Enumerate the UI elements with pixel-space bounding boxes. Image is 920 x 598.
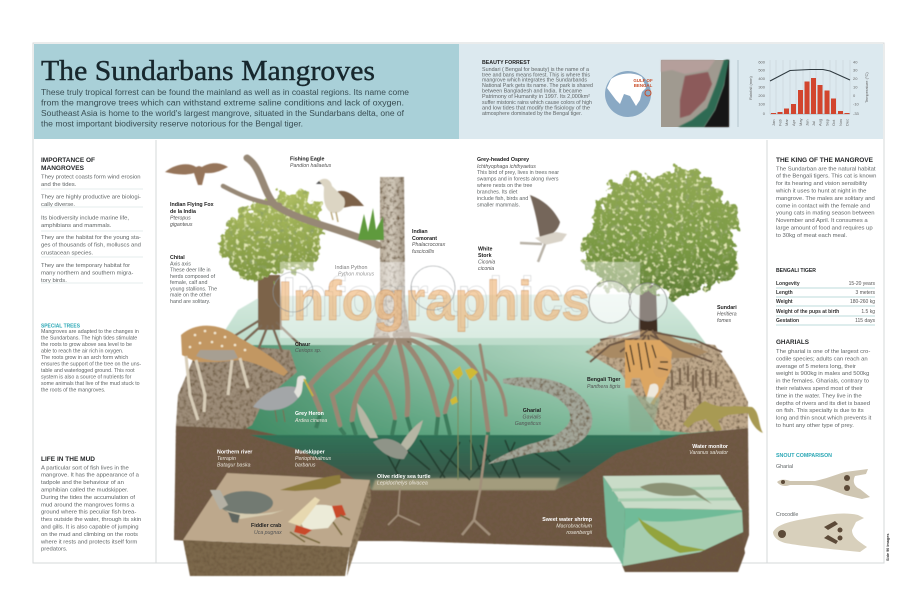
label: northern river terrapin: Terrapin — [217, 456, 236, 462]
image credit: Side 90 Images — [886, 534, 890, 561]
panel: special trees: Mangroves are adapted to the changes in — [41, 329, 139, 335]
panel: importance of mangroves: ges of thousands of fish, molluscs and — [41, 242, 141, 248]
right axis: 0 — [853, 93, 856, 98]
panel: life in the mud: ground where this peculiar fish brea- — [41, 510, 136, 516]
right axis — [853, 60, 860, 116]
central trunk — [372, 177, 412, 345]
panel: king of the mangrove: of the Bengali tigers. This cat is known — [776, 174, 876, 180]
panel: gharials: their relatives spend most of their — [776, 386, 863, 392]
right axis: 10 — [853, 84, 858, 90]
month labels: Feb — [778, 118, 782, 126]
label: sweet water shrimp: Macrobrachium — [556, 524, 593, 530]
month labels: Sep — [824, 118, 830, 126]
panel: importance of mangroves: many northern and southern migra- — [41, 270, 133, 276]
label: grey-headed osprey: where nests on the tree — [477, 183, 532, 189]
panel: importance of mangroves: They are highly productive are biologi- — [41, 195, 141, 201]
label: white stork: Stork — [478, 253, 492, 259]
label: white stork: Ciconia — [478, 260, 495, 266]
branches — [247, 158, 378, 245]
month labels: Dec — [844, 119, 850, 126]
label: water monitor: Water monitor — [692, 444, 728, 450]
icon: flying osprey — [520, 195, 567, 262]
panel: gharials: average of 5 meters long, their — [776, 364, 856, 370]
labels on illustration — [170, 157, 737, 536]
label: grey-headed osprey: swamps and in forests along rivers — [477, 176, 559, 182]
icon: crocodile skull — [773, 514, 867, 552]
label: cormorant: Phalacrocorax — [412, 242, 446, 248]
panel: importance of mangroves: crustacean species. — [41, 250, 93, 256]
panel: life in the mud: LIFE IN THE MUD — [41, 456, 95, 463]
icon: mudskipper — [280, 475, 341, 491]
panel: importance of mangroves: and the tides. — [41, 182, 77, 188]
label: chital: Axis axis — [170, 262, 191, 268]
sandy river bed — [372, 478, 560, 490]
label: sweet water shrimp — [542, 517, 593, 536]
left tree canopy — [219, 192, 325, 279]
table: bengali tiger: BENGALI TIGER — [776, 268, 816, 274]
table: bengali tiger: 180-260 kg — [850, 299, 875, 305]
panel: importance of mangroves — [41, 157, 143, 284]
month labels — [771, 118, 850, 126]
sample top face — [603, 475, 742, 510]
icon: olive ridley turtle — [357, 403, 423, 459]
left axis: 400 — [758, 76, 766, 81]
label: chital: hand are solitary. — [170, 299, 210, 305]
panel: special trees: The roots grow in an arch form which — [41, 355, 128, 361]
label: flying fox: Pteropus — [170, 216, 191, 222]
label: fishing eagle: Pandion haliaetus — [290, 163, 332, 169]
month labels: Mar — [784, 118, 789, 126]
panel: gharials: on fish. This specialty is due to its — [776, 408, 864, 414]
sample left face — [603, 476, 625, 566]
right axis: 20 — [853, 76, 858, 81]
panel: gharials: to hunt any other type of prey. — [776, 423, 854, 429]
label: chaur: Chaur — [295, 342, 310, 348]
panel: importance of mangroves: amphibians and mammals. — [41, 223, 112, 229]
label: sundari: fomes — [717, 318, 732, 324]
panel: importance of mangroves: They are the habitat for the young sta- — [41, 235, 141, 241]
label: cormorant: fuscicollis — [412, 249, 435, 255]
mangrove illustration — [165, 158, 763, 576]
panel: special trees — [41, 323, 141, 394]
label: python — [335, 265, 374, 278]
label: cormorant: Indian — [412, 229, 428, 235]
satellite map — [661, 60, 729, 127]
watermark: Infographics — [282, 265, 592, 328]
panel: gharials: weight is 900kg in males and 500kg — [775, 371, 869, 377]
label: flying fox — [170, 202, 214, 228]
label: chaur — [295, 342, 321, 354]
label: cormorant — [412, 229, 446, 255]
block: mud sample — [183, 473, 371, 576]
table: bengali tiger: Weight of the pups at birth — [776, 309, 839, 315]
intro text: the most important biodiversity reserve notorious for the Bengal tiger. — [41, 120, 303, 128]
label: sweet water shrimp: rosenbergii — [566, 530, 593, 536]
panel: importance of mangroves: MANGROVES — [41, 165, 84, 172]
month labels: Nov — [838, 119, 843, 126]
water shading — [240, 345, 660, 435]
header panel: title and intro — [34, 44, 459, 139]
label: grey heron: Ardea cinerea — [294, 418, 327, 424]
panel: importance of mangroves: They are the temporary habitat for — [41, 263, 130, 269]
chart separator — [737, 60, 739, 127]
label: white stork: White — [478, 247, 492, 253]
left axis: 600 — [758, 60, 766, 64]
short root into soil — [388, 488, 420, 525]
table: bengali tiger — [776, 268, 876, 325]
label: water monitor — [689, 444, 728, 456]
label: mudskipper: Periophthalmus — [295, 456, 331, 462]
label: white stork — [478, 247, 495, 272]
label: grey-headed osprey: This bird of prey, lives in trees near — [477, 170, 559, 176]
label: water monitor: Varanus salvator — [689, 450, 728, 456]
icon: gharial — [488, 377, 592, 464]
label: chital: young stallions. The — [170, 286, 217, 292]
beauty forrest text: Patrimony of Humanity in 1997. Its 2,000km² — [482, 94, 590, 100]
icon: gharial skull — [777, 469, 870, 499]
label: grey-headed osprey: branches. Its diet — [477, 190, 518, 196]
label: fishing eagle — [290, 157, 332, 169]
panel: special trees: the roots to grow above sea level to be — [41, 342, 132, 348]
watermark: Infographics — [278, 269, 590, 332]
block right face — [347, 480, 371, 576]
label: olive ridley sea turtle: Lepidochelys olivacea — [377, 480, 428, 486]
label: flying fox: de la India — [170, 209, 196, 215]
tiger reflection — [628, 395, 660, 432]
table: bengali tiger: 1.5 kg — [861, 309, 875, 315]
seedling with yellow leaves — [450, 366, 478, 480]
panel: king of the mangrove — [775, 157, 876, 239]
title: The Sundarbans Mangroves — [41, 55, 375, 87]
panel: special trees: the Sundarbans. The high tides stimulate — [41, 336, 137, 342]
label: northern river terrapin: Batagur baska — [217, 462, 251, 468]
panel: king of the mangrove: November and April. It consumes a — [776, 218, 868, 224]
beauty forrest text: National Park gets its name. The park is shared — [482, 83, 593, 89]
panel: snout comparison: Crocodile — [776, 512, 798, 518]
locator globe: BENGAL — [634, 83, 653, 88]
label: grey-headed osprey — [477, 157, 559, 208]
month labels: Oct — [831, 119, 836, 126]
beauty forrest text: tree and bans means forest. This is where this — [482, 72, 590, 78]
panel: special trees: some animals that live of the mud stuck to — [41, 381, 140, 387]
panel: king of the mangrove: The Sundarban are the natural habitat — [776, 166, 876, 172]
label: grey-headed osprey: Grey-headed Osprey — [477, 157, 529, 163]
right tree — [584, 170, 738, 362]
label: chital: herds composed of — [170, 274, 216, 280]
panel: special trees: SPECIAL TREES — [41, 323, 80, 329]
month labels: Jun — [804, 120, 810, 126]
label: olive ridley sea turtle: Olive ridley sea turtle — [377, 474, 431, 480]
left axis — [758, 60, 766, 116]
long root into soil — [462, 435, 490, 535]
sample sand floor — [623, 512, 743, 566]
label: gharial: Gavialis — [523, 414, 541, 420]
month labels: Jul — [811, 121, 816, 126]
icon: indian flying fox — [165, 163, 228, 185]
header panel: beauty forrest, map and climate chart — [459, 44, 883, 139]
left axis: 100 — [758, 102, 766, 106]
label: bengal tiger: Panthera tigris — [587, 384, 621, 390]
panel: life in the mud: mud around the mangroves forms a — [41, 502, 135, 508]
panel: snout comparison: Gharial — [776, 464, 793, 470]
pale water dome — [222, 294, 720, 435]
label: fiddler crab: Uca pugnax — [254, 530, 282, 536]
label: grey-headed osprey: Ichthyophaga ichthyaetus — [477, 164, 536, 170]
beauty forrest text: between Bangladesh and India. It became — [482, 88, 582, 94]
label: chital: Chital — [170, 255, 185, 261]
panel: king of the mangrove: THE KING OF THE MANGROVE — [776, 157, 873, 164]
left bank — [176, 345, 297, 429]
label: chital: female, calf and — [170, 280, 207, 286]
beauty forrest text: BEAUTY FORREST — [482, 60, 531, 66]
beauty forrest text: Sundari ( Bengal for beauty) is the name of a — [482, 67, 589, 73]
grass tuft — [358, 208, 384, 240]
icon: bengal tiger — [625, 340, 672, 432]
panel: gharials: The gharial is one of the largest cro- — [776, 349, 870, 355]
right tree root tangle — [596, 330, 708, 358]
panel: importance of mangroves: IMPORTANCE OF — [41, 157, 95, 164]
panel: life in the mud: on the mud and climbing on the roots — [41, 532, 138, 538]
panel: gharials — [775, 339, 872, 429]
right bank — [585, 335, 748, 433]
panel: life in the mud: where it rests and protects itself form — [40, 539, 137, 545]
icon: shrimp front — [638, 517, 706, 553]
panel: life in the mud: A particular sort of fish lives in the — [41, 465, 129, 471]
panel: gharials: GHARIALS — [776, 339, 809, 346]
panel: king of the mangrove: young cats in mating season between — [776, 211, 875, 217]
label: chital — [170, 255, 217, 305]
root reflections — [316, 414, 488, 436]
panel: special trees: able to reach the air rich in oxygen. — [41, 348, 123, 354]
sample front face — [623, 508, 743, 566]
beauty forrest text: suffer mistonic rains which cause colors of high — [482, 100, 592, 106]
right axis: 30 — [853, 68, 858, 72]
panel: king of the mangrove: to 30kg of meat each meal. — [776, 233, 847, 239]
table: bengali tiger: Weight — [776, 299, 793, 305]
intro text — [41, 88, 410, 128]
table: bengali tiger: Longevity — [776, 281, 800, 287]
rainfall bars — [771, 78, 850, 114]
month labels: Apr — [791, 119, 796, 126]
panel: gharials: depths of rivers and its diet is based — [776, 401, 870, 407]
label: grey heron — [294, 411, 327, 424]
label: olive ridley sea turtle — [377, 474, 431, 486]
icon: fishing eagle — [316, 179, 364, 222]
label: flying fox: giganteus — [170, 222, 193, 228]
panel: importance of mangroves: They protect coasts form wind erosion — [41, 174, 141, 180]
axis title right: Temperature (°C) — [864, 72, 869, 103]
label: python: Indian Python — [335, 265, 367, 271]
right axis: -33 — [853, 111, 860, 116]
intro text: from the mangrove trees which can withstand extreme saline conditions and lack of oxygen. — [41, 98, 404, 108]
label: chital: These deer life in — [170, 268, 211, 274]
panel: life in the mud: amphibian called the mudskipper. — [41, 488, 129, 494]
panel: king of the mangrove: come in contact with the female and — [776, 203, 870, 209]
table: bengali tiger: 115 days — [855, 318, 876, 324]
beauty forrest text: atmosphere dominated by the Bengal tiger. — [482, 111, 582, 117]
panel: snout comparison: SNOUT COMPARISON — [776, 453, 832, 459]
panel: life in the mud: mangrove. It has the appearance of a — [41, 473, 140, 479]
central tree — [223, 158, 506, 535]
table: bengali tiger: Length — [776, 290, 793, 296]
label: mudskipper: Mudskipper — [295, 450, 325, 456]
underwater strip — [250, 435, 680, 490]
panel: special trees: table and waterlogged ground. This root — [41, 368, 135, 374]
panel: gharials: codile species; adults can reach an — [776, 356, 868, 362]
table: bengali tiger: 3 meters — [856, 290, 875, 296]
right axis: 40 — [853, 60, 858, 64]
label: mudskipper — [295, 450, 331, 468]
label: chital: male on the other — [170, 293, 211, 299]
table: bengali tiger: 15-20 years — [849, 281, 875, 287]
axis titles: Rainfall (mm) — [748, 76, 753, 100]
label: bengal tiger: Bengali Tiger — [587, 377, 620, 383]
label: grey heron: Grey Heron — [295, 411, 324, 417]
beauty forrest text — [482, 60, 593, 117]
panel: life in the mud: and gills. It is also capable of jumping — [41, 524, 139, 530]
icon: grey heron — [253, 376, 313, 422]
beauty forrest text: and low tides that modify the fisiology of the — [482, 106, 590, 112]
beauty forrest text: mangrove which integrates the Sundarbands — [482, 78, 587, 84]
panel: special trees: system is also a source of nutrients for — [41, 374, 132, 380]
icon: fiddler crab — [288, 497, 350, 543]
icon: spotted deer — [181, 326, 288, 420]
icon: water monitor — [683, 401, 763, 433]
label: gharial — [515, 408, 542, 427]
soil cross-section — [174, 425, 749, 553]
pneumatophores on right bank — [672, 366, 716, 410]
icon: terrapin — [210, 490, 284, 523]
locator globe: GULF OF — [633, 78, 653, 83]
panel: life in the mud: During the tides the accumulation of — [41, 495, 135, 501]
month labels: Jan — [771, 120, 776, 126]
label: bengal tiger — [587, 377, 621, 390]
icon: shrimp top — [640, 483, 712, 504]
label: northern river terrapin — [217, 450, 252, 468]
lower branch — [223, 186, 280, 205]
panel: gharials: time in the water. They live in the — [776, 393, 862, 399]
left tree — [219, 192, 325, 352]
label: fishing eagle: Fishing Eagle — [290, 157, 324, 163]
panel: life in the mud: tadpole and the behaviour of an — [41, 480, 124, 486]
panel: king of the mangrove: large amount of food and requires up — [776, 226, 873, 232]
label: sweet water shrimp: Sweet water shrimp — [542, 517, 593, 523]
left axis: 300 — [758, 84, 766, 90]
panel: importance of mangroves: Its biodiversity include marine life, — [41, 216, 129, 222]
panel: king of the mangrove: mangrove. The males are solitary and — [776, 196, 875, 202]
central arching roots — [310, 334, 506, 430]
left axis: 0 — [763, 111, 766, 116]
label: sundari: Sundari — [717, 305, 737, 311]
label: sundari: Heritiera — [717, 312, 737, 318]
label: fiddler crab — [251, 523, 282, 536]
panel: special trees: ensures the support of the tree on the uns- — [41, 362, 141, 368]
locator globe — [605, 71, 653, 117]
label: white stork: ciconia — [478, 266, 494, 272]
label: northern river terrapin: Northern river — [217, 450, 252, 456]
sample soil base — [622, 535, 745, 572]
label: grey-headed osprey: include fish, birds and — [477, 196, 528, 202]
panel: snout comparison — [773, 453, 870, 552]
table: bengali tiger: Gestation — [776, 318, 799, 324]
right tree canopy — [584, 170, 738, 295]
left axis: 500 — [758, 68, 766, 72]
temperature line — [770, 70, 850, 81]
left axis: 200 — [758, 93, 766, 98]
label: fiddler crab: Fiddler crab — [251, 523, 282, 529]
block front face — [183, 540, 350, 576]
panel: life in the mud — [40, 456, 141, 553]
panel: life in the mud: thes outside the water, through its skin — [41, 517, 141, 523]
block top face — [183, 473, 370, 547]
label: gharial: Gangeticus — [515, 421, 541, 427]
label: gharial: Gharial — [523, 408, 542, 414]
panel: gharials: in the females. Gharials, contrary to — [776, 379, 870, 385]
label: chaur: Ceriops sp. — [295, 348, 321, 354]
right axis: -10 — [853, 102, 860, 106]
block: shrimp water sample — [603, 475, 745, 572]
intro text: Southeast Asia is home to the world's largest mangrove, situated in the Sundarbans delta, one of — [41, 109, 405, 118]
right tree trunk — [638, 285, 658, 345]
month labels: May — [798, 118, 803, 126]
left tree trunk — [258, 275, 282, 330]
label: sundari — [717, 305, 737, 324]
label: flying fox: Indian Flying Fox — [170, 202, 214, 208]
label: cormorant: Comorant — [412, 236, 437, 242]
underwater root mass — [385, 438, 570, 480]
month labels: Aug — [818, 119, 822, 126]
panel: importance of mangroves: tory birds. — [41, 278, 67, 284]
label: python: Python molurus — [338, 272, 374, 278]
panel: special trees: the roots of the mangroves. — [41, 388, 105, 394]
label: grey-headed osprey: smaller mammals. — [477, 202, 520, 208]
intro text: These truly tropical forrest can be found the mainland as well as in coastal regions. Its name come — [41, 88, 410, 97]
rainfall and temperature chart — [748, 60, 869, 126]
panel: king of the mangrove: for its hearing and vision sensibility — [776, 181, 867, 187]
panel: importance of mangroves: cally diverse. — [41, 202, 75, 208]
panel: gharials: long and thin snout which prevents it — [776, 416, 872, 422]
panel: king of the mangrove: which it uses to hunt at night in the — [775, 188, 867, 194]
panel: life in the mud: predators. — [41, 547, 68, 553]
label: mudskipper: barbarus — [295, 462, 316, 468]
right tree roots — [590, 330, 722, 362]
